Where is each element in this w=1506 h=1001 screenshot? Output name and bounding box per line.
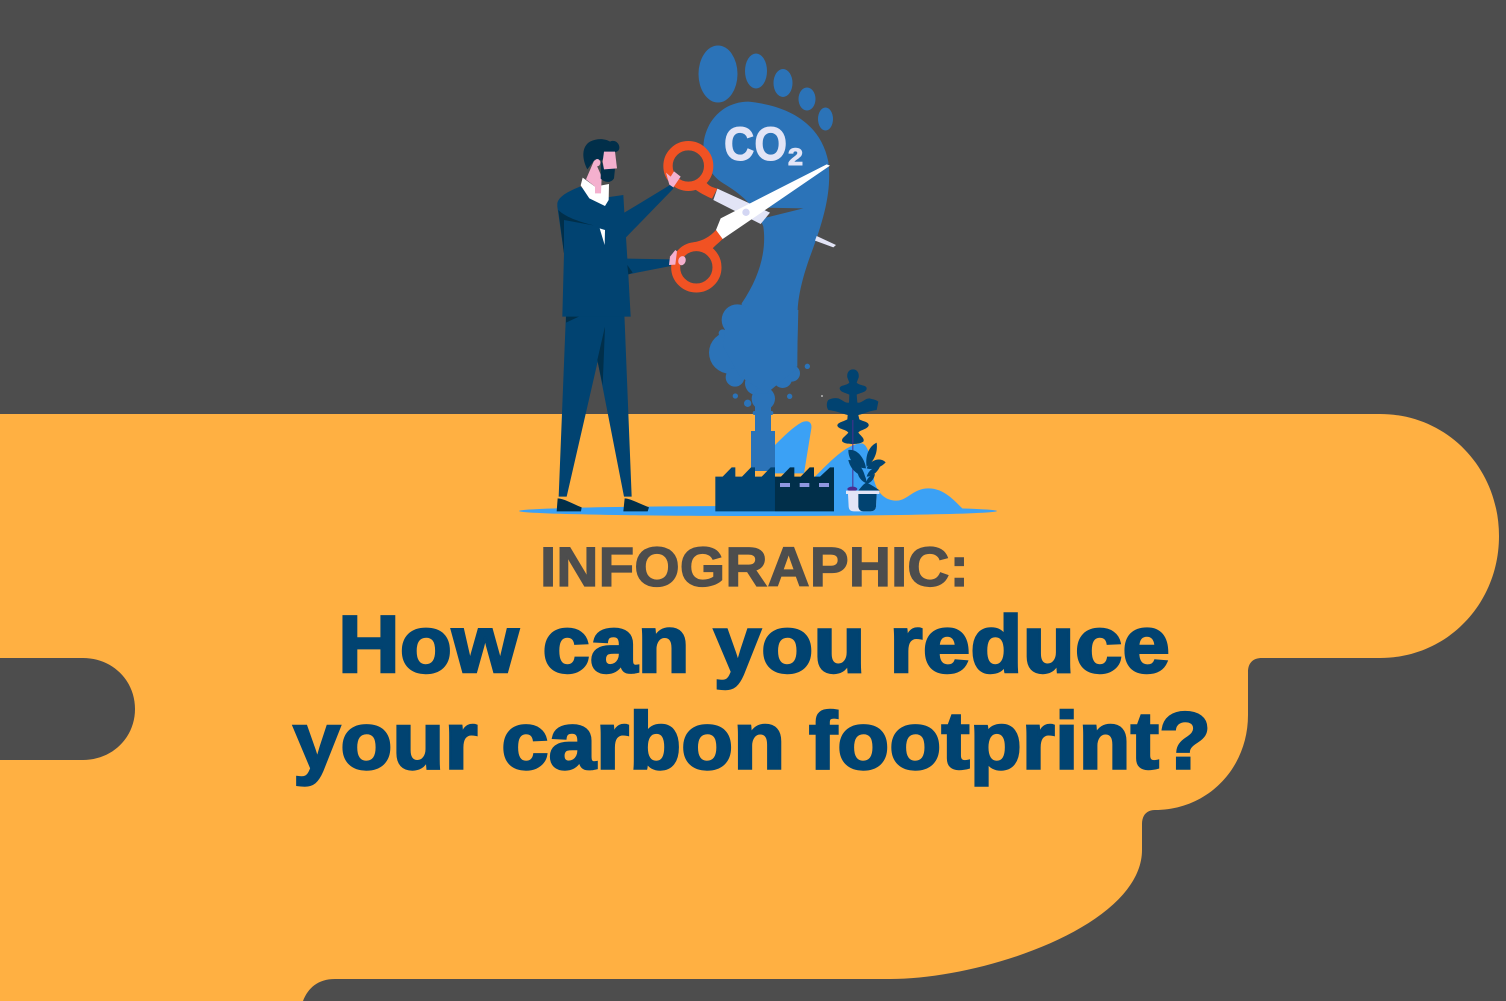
CO2 label: CO bbox=[724, 117, 787, 170]
businessman bbox=[557, 139, 673, 511]
main title: your carbon footprint? bbox=[293, 696, 1211, 786]
orange background shape bbox=[0, 414, 1499, 1001]
factory bbox=[715, 467, 834, 511]
ground puddle bbox=[519, 506, 997, 516]
torso, arms and head bbox=[557, 139, 673, 317]
CO2 label: 2 bbox=[788, 144, 803, 171]
toes bbox=[698, 46, 833, 130]
scissors bbox=[666, 146, 836, 288]
tall plant bbox=[827, 369, 878, 491]
pivot bbox=[742, 209, 750, 216]
main title bbox=[293, 600, 1211, 786]
foot sole bbox=[703, 102, 829, 367]
potted plant bbox=[846, 443, 886, 511]
upper handle ring bbox=[668, 146, 709, 186]
leaves bbox=[848, 443, 886, 491]
hair bbox=[583, 139, 619, 169]
heading label: INFOGRAPHIC: bbox=[540, 535, 969, 598]
lower handle ring bbox=[676, 247, 717, 288]
face bbox=[603, 152, 617, 169]
jacket shading bbox=[558, 210, 593, 253]
neck bbox=[586, 160, 602, 193]
beard bbox=[601, 159, 615, 182]
blue hills bbox=[775, 421, 964, 511]
cut notch in foot bbox=[747, 207, 803, 220]
flower pot bbox=[846, 491, 879, 511]
shirt collar bbox=[581, 178, 609, 206]
factory chimney bbox=[751, 431, 775, 471]
smoke cloud bbox=[709, 304, 823, 433]
ear bbox=[594, 159, 600, 166]
lower handle neck bbox=[693, 230, 723, 252]
footprint with CO2 bbox=[698, 46, 833, 433]
lower blade tip bbox=[815, 236, 836, 247]
legs bbox=[557, 313, 649, 511]
lower blade bbox=[713, 189, 770, 224]
main title: How can you reduce bbox=[338, 600, 1170, 690]
arm shading bbox=[627, 265, 633, 274]
upper blade bbox=[716, 164, 830, 239]
upper handle neck bbox=[692, 178, 717, 199]
jacket bbox=[557, 184, 673, 317]
hands bbox=[666, 171, 687, 266]
